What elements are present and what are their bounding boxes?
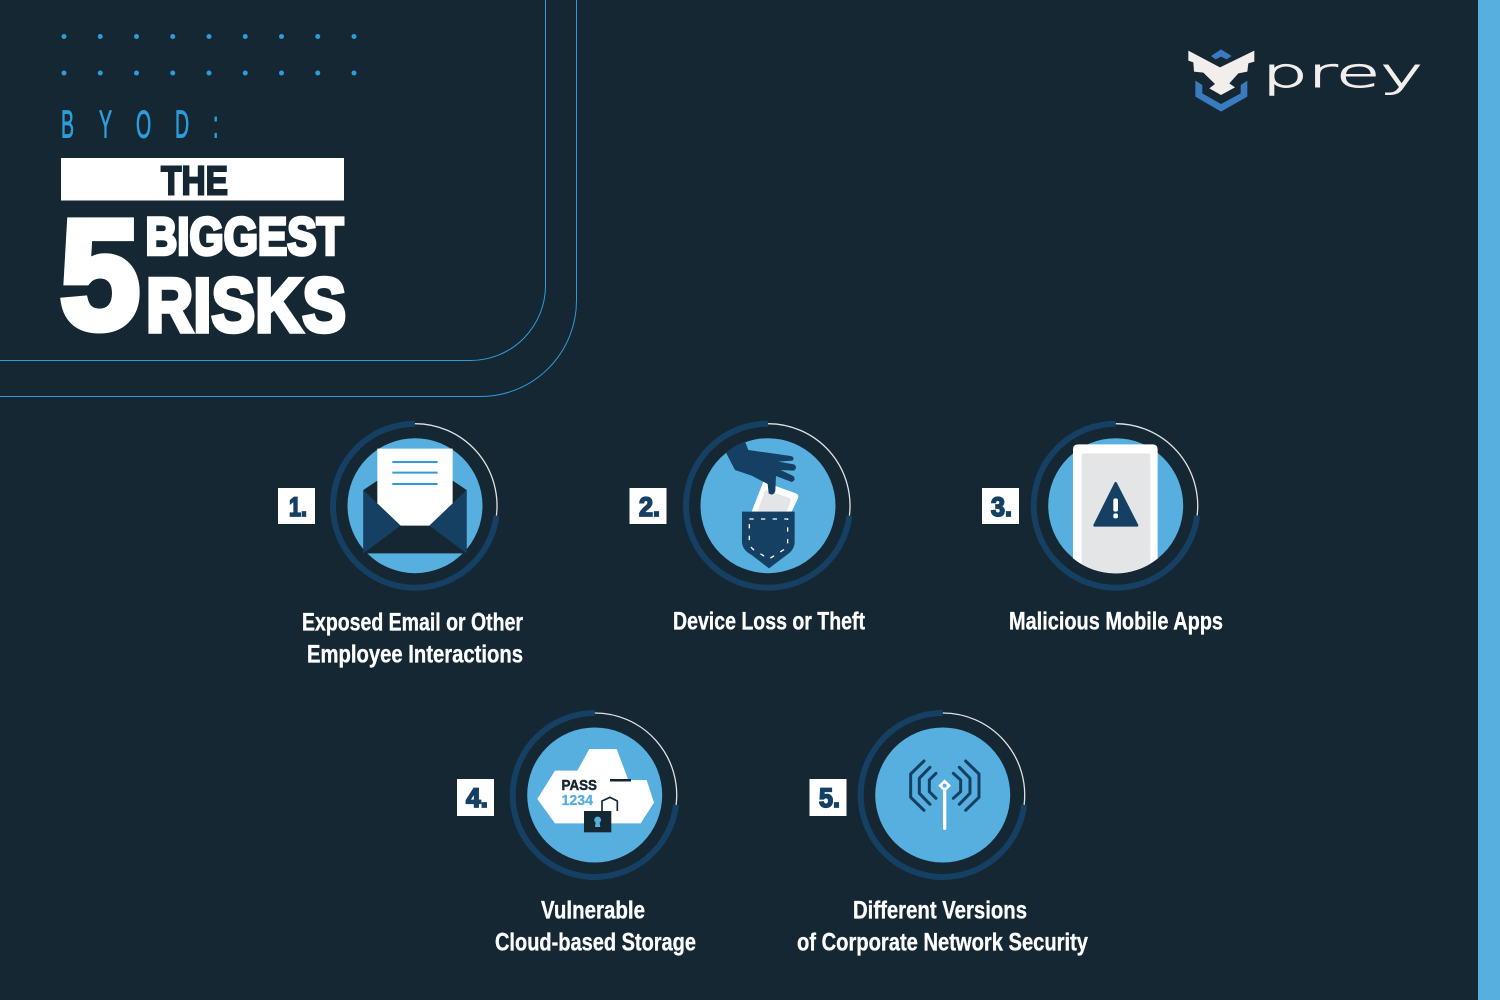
progress ring 1 — [333, 424, 497, 588]
subtitle: BYOD: BYOD: — [61, 102, 218, 146]
password digits: 1234 — [562, 793, 593, 809]
number badge 4: 4. — [466, 783, 488, 813]
title bar: THE — [61, 158, 344, 204]
label 3: Malicious Mobile Apps — [1009, 608, 1223, 636]
label 5: Different Versions — [853, 896, 1027, 924]
number badge 2: 2. — [639, 492, 660, 522]
heading: RISKS: RISKS — [146, 264, 346, 348]
progress ring 2 — [686, 424, 850, 588]
label 4: Vulnerable — [541, 896, 645, 924]
big numeral 5: 5 — [60, 188, 140, 361]
label 4: Cloud-based Storage — [495, 928, 696, 956]
circle 4 — [527, 728, 662, 862]
number badge 3 — [982, 488, 1019, 524]
open padlock — [584, 797, 617, 832]
circle 3 — [1048, 438, 1183, 573]
dot grid — [62, 34, 356, 76]
label 1: Exposed Email or Other — [302, 608, 523, 636]
heading: BIGGEST: BIGGEST — [146, 208, 344, 266]
number badge 3: 3. — [991, 492, 1012, 522]
icon: cloud with password and lock — [537, 749, 654, 832]
title bar: THE: THE — [161, 158, 228, 204]
number badge 1: 1. — [289, 492, 307, 522]
password text: PASS — [562, 778, 597, 794]
dash mark — [610, 779, 631, 782]
icon: open envelope with letter — [363, 449, 467, 553]
label 2: Device Loss or Theft — [673, 608, 866, 636]
risk 1: exposed email — [278, 424, 523, 668]
number badge 1 — [278, 488, 315, 524]
number badge 4 — [457, 779, 494, 816]
logo wordmark: prey — [1262, 51, 1423, 97]
risk 2: device loss — [630, 424, 866, 636]
label 1 — [302, 608, 523, 668]
icon: signal antenna — [911, 761, 979, 828]
progress ring 5 — [861, 713, 1025, 877]
number badge 2 — [630, 488, 666, 524]
number badge 5 — [810, 779, 846, 816]
logo mark — [1188, 49, 1254, 112]
label 5 — [797, 896, 1088, 956]
icon: hand and phone in pocket — [726, 442, 798, 568]
title block — [60, 102, 346, 361]
risk 3: malicious apps — [982, 424, 1223, 636]
circle 1 — [348, 438, 482, 573]
circle 2 — [700, 438, 836, 573]
circle 5 — [875, 728, 1010, 862]
logo: prey — [1188, 49, 1423, 112]
label 5: of Corporate Network Security — [797, 928, 1088, 956]
progress ring 3 — [1034, 424, 1198, 588]
risk 5: network security — [797, 713, 1088, 956]
label 4 — [495, 896, 696, 956]
risk 4: cloud storage — [457, 713, 696, 956]
cloud shape — [537, 749, 654, 823]
label 1: Employee Interactions — [307, 640, 523, 668]
right accent bar — [1478, 0, 1500, 1000]
corner frame lines — [0, 0, 577, 396]
icon: phone with warning triangle — [1073, 444, 1158, 573]
number badge 5: 5. — [819, 783, 840, 813]
progress ring 4 — [513, 713, 677, 877]
